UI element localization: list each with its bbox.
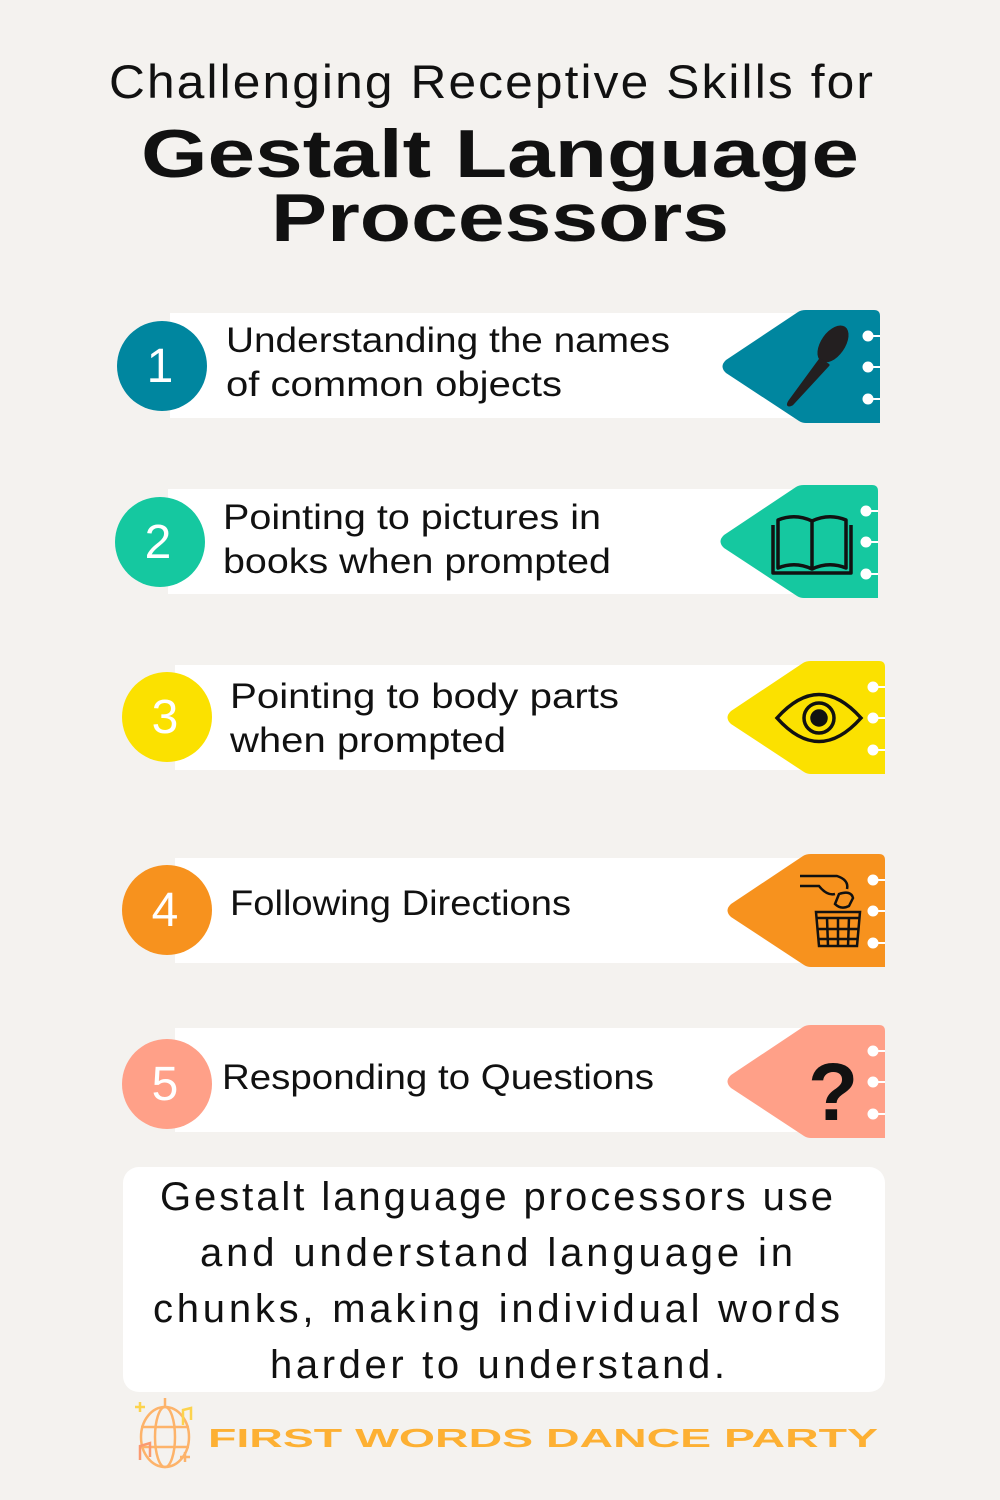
item 2: Pointing to pictures in [223,498,601,537]
summary text box [123,1167,885,1392]
summary text box: and understand language in [200,1231,793,1275]
item 5 [122,1025,885,1138]
item 3: 3 [152,691,178,744]
title [109,55,875,256]
item 4: Following Directions [230,884,571,923]
item 2: books when prompted [223,542,611,581]
item 5: Responding to Questions [222,1058,654,1097]
summary text box: Gestalt language processors use [160,1175,833,1219]
icon: disco ball [135,1398,191,1467]
item 1: of common objects [226,365,562,404]
item 4: 4 [152,884,178,937]
title: Gestalt Language [141,116,859,192]
footer logo [135,1398,878,1467]
icon: question mark: ? [808,1047,858,1138]
icon: eye [777,694,861,742]
item 1 [117,310,880,423]
summary text box: harder to understand. [270,1343,725,1387]
footer logo: FIRST WORDS DANCE PARTY [208,1423,878,1453]
item 1: Understanding the names [226,321,670,360]
title: Challenging Receptive Skills for [109,55,875,108]
item 1: 1 [147,340,173,393]
item 3: when prompted [229,721,506,760]
item 2 [115,485,878,598]
icon: book [773,517,851,573]
item 5: 5 [152,1058,178,1111]
item 4 [122,854,885,967]
item 3 [122,661,885,774]
summary text box: chunks, making individual words [153,1287,840,1331]
icon: spoon [788,320,855,405]
item 3: Pointing to body parts [230,677,619,716]
item 2: 2 [145,516,171,569]
icon: trash [800,876,860,946]
title: Processors [271,180,729,256]
